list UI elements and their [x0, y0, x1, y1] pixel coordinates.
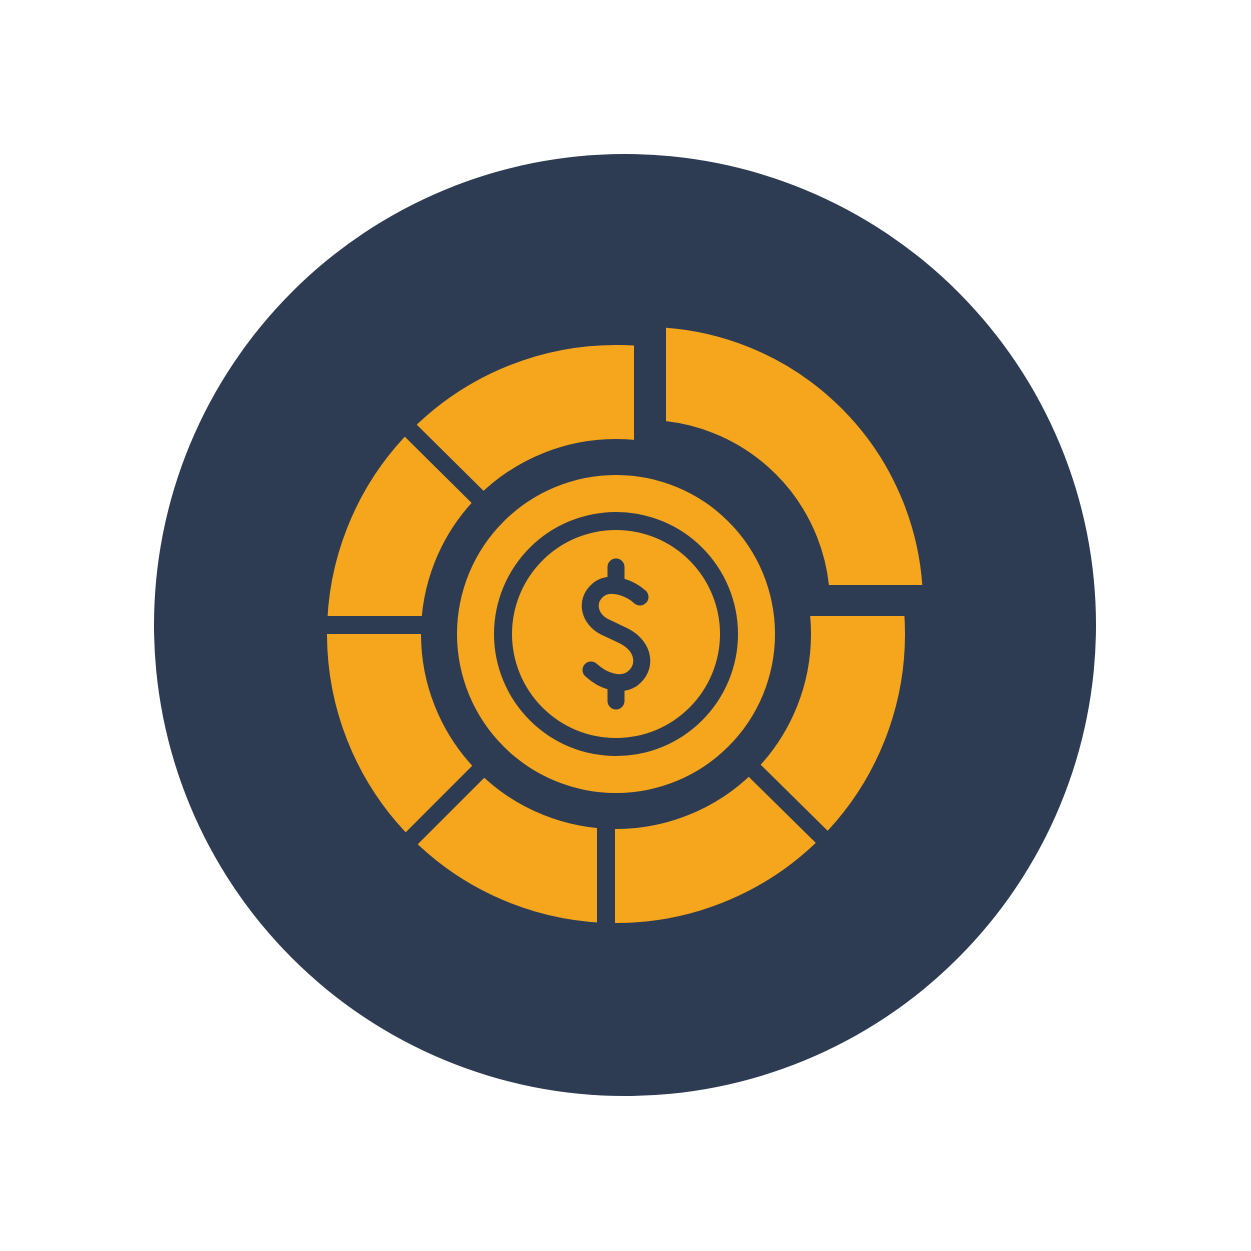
background circle [154, 154, 1096, 1096]
coin [457, 475, 775, 793]
exploded segment [666, 328, 922, 585]
dollar sign [590, 567, 642, 701]
icon: donut chart with dollar coin [154, 154, 1096, 1096]
donut ring segments [320, 300, 954, 930]
